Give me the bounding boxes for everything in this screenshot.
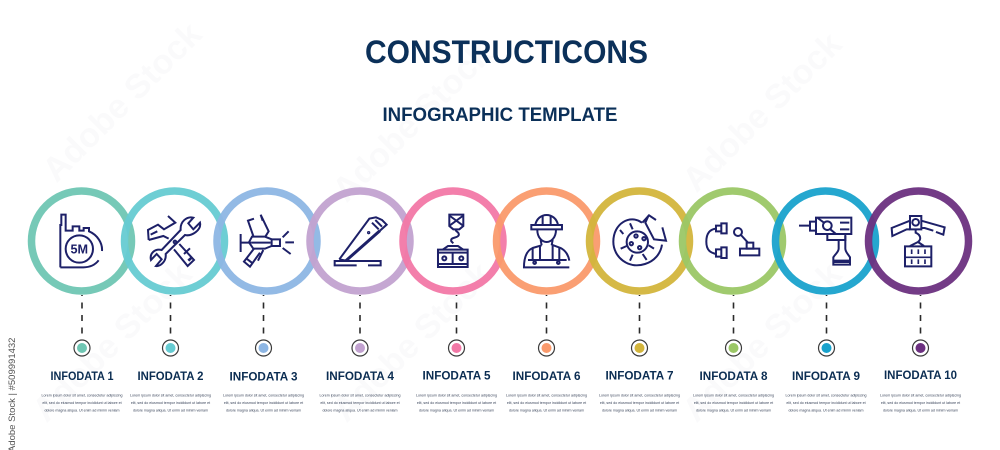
body text 6: dolore magna aliqua. Ut enim ad minim veniam xyxy=(509,408,584,412)
body text 10: elit, sed do eiusmod tempor incididunt ut labore et xyxy=(881,401,960,405)
marker 7 xyxy=(632,340,648,356)
label 6: INFODATA 6 xyxy=(512,369,581,383)
connector line 6 xyxy=(546,295,548,341)
body text 9: Lorem ipsum dolor sit amet, consectetur adipiscing xyxy=(786,394,866,398)
ring 7 xyxy=(590,191,690,291)
body text 2 xyxy=(130,394,211,412)
body text 7: dolore magna aliqua. Ut enim ad minim veniam xyxy=(602,408,677,412)
connector line 2 xyxy=(170,295,172,341)
icon: crane with container xyxy=(892,216,945,266)
body text 4: elit, sed do eiusmod tempor incididunt ut labore et xyxy=(320,401,400,405)
connector line 1 xyxy=(81,295,83,341)
marker 2 xyxy=(162,340,178,356)
ring 5 xyxy=(403,191,503,291)
body text 8: dolore magna aliqua. Ut enim ad minim veniam xyxy=(696,408,771,412)
label 3: INFODATA 3 xyxy=(230,370,298,384)
marker 3 xyxy=(256,340,272,356)
ring 2 xyxy=(124,191,224,291)
marker 10 xyxy=(912,340,928,356)
body text 4: Lorem ipsum dolor sit amet, consectetur adipiscing xyxy=(320,394,400,398)
ring 8 xyxy=(682,191,782,291)
label 7: INFODATA 7 xyxy=(606,368,674,382)
body text 10 xyxy=(880,394,961,412)
marker 4 xyxy=(352,340,368,356)
connector line 3 xyxy=(262,295,264,341)
body text 2: elit, sed do eiusmod tempor incididunt ut labore et xyxy=(131,401,210,405)
body text 2: Lorem ipsum dolor sit amet, consectetur adipiscing xyxy=(130,394,211,398)
ring 1 xyxy=(32,191,132,291)
label 1: INFODATA 1 xyxy=(50,369,114,383)
label 8: INFODATA 8 xyxy=(700,369,768,383)
connector line 4 xyxy=(359,295,361,341)
body text 1: elit, sed do eiusmod tempor incididunt ut labore et xyxy=(42,401,122,405)
body text 7: elit, sed do eiusmod tempor incididunt ut labore et xyxy=(600,401,679,405)
body text 2: dolore magna aliqua. Ut enim ad minim veniam xyxy=(133,408,208,412)
body text 9: elit, sed do eiusmod tempor incididunt ut labore et xyxy=(786,401,866,405)
icon: wrench and screwdriver xyxy=(148,216,200,266)
body text 9 xyxy=(786,394,866,412)
text: Adobe Stock xyxy=(25,255,199,429)
icon: spray gun xyxy=(241,215,294,267)
body text 6: Lorem ipsum dolor sit amet, consectetur adipiscing xyxy=(506,394,587,398)
marker 5 xyxy=(448,340,464,356)
ring 3 xyxy=(217,191,317,291)
body text 3: Lorem ipsum dolor sit amet, consectetur adipiscing xyxy=(223,394,304,398)
body text 10: dolore magna aliqua. Ut enim ad minim veniam xyxy=(883,408,958,412)
marker 8 xyxy=(726,340,742,356)
label 10: INFODATA 10 xyxy=(884,368,957,382)
connector line 8 xyxy=(732,295,734,341)
subtitle: INFOGRAPHIC TEMPLATE xyxy=(382,104,618,126)
body text 4: dolore magna aliqua. Ut enim ad minim veniam xyxy=(322,408,398,412)
ring 6 xyxy=(496,191,596,291)
body text 5: Lorem ipsum dolor sit amet, consectetur adipiscing xyxy=(416,394,497,398)
text: Adobe Stock xyxy=(325,35,499,209)
connector line 9 xyxy=(826,295,828,341)
icon: saw xyxy=(335,217,387,265)
label 2: INFODATA 2 xyxy=(138,369,204,383)
body text 7: Lorem ipsum dolor sit amet, consectetur adipiscing xyxy=(599,394,680,398)
body text 10: Lorem ipsum dolor sit amet, consectetur adipiscing xyxy=(880,394,961,398)
text: Adobe Stock xyxy=(35,15,209,189)
body text 8: Lorem ipsum dolor sit amet, consectetur adipiscing xyxy=(693,394,774,398)
body text 1: Lorem ipsum dolor sit amet, consectetur adipiscing xyxy=(42,394,122,398)
body text 5 xyxy=(416,394,497,412)
body text 3 xyxy=(223,394,304,412)
body text 4 xyxy=(320,394,400,412)
body text 7 xyxy=(599,394,680,412)
marker 6 xyxy=(538,340,554,356)
label 9: INFODATA 9 xyxy=(792,369,860,383)
text: Adobe Stock xyxy=(675,255,849,429)
label 4: INFODATA 4 xyxy=(326,369,394,383)
ring 9 xyxy=(776,191,876,291)
marker 9 xyxy=(818,340,834,356)
icon: tape measure: 5M xyxy=(71,243,88,257)
body text 8: elit, sed do eiusmod tempor incididunt ut labore et xyxy=(694,401,773,405)
body text 6 xyxy=(506,394,587,412)
stock watermark id: Adobe Stock | #509991432 xyxy=(7,338,18,450)
connector line 5 xyxy=(456,295,458,341)
ring 10 xyxy=(868,191,968,291)
connector line 7 xyxy=(638,295,640,341)
label 5: INFODATA 5 xyxy=(422,368,491,382)
body text 3: dolore magna aliqua. Ut enim ad minim veniam xyxy=(226,408,301,412)
ring 4 xyxy=(310,191,410,291)
icon: brake disc xyxy=(613,215,666,265)
body text 6: elit, sed do eiusmod tempor incididunt ut labore et xyxy=(507,401,586,405)
body text 8 xyxy=(693,394,774,412)
marker 1 xyxy=(74,340,90,356)
body text 1 xyxy=(42,394,122,412)
icon: construction worker xyxy=(524,215,569,267)
icon: tape measure xyxy=(60,215,102,267)
body text 3: elit, sed do eiusmod tempor incididunt ut labore et xyxy=(224,401,303,405)
body text 1: dolore magna aliqua. Ut enim ad minim veniam xyxy=(44,408,120,412)
body text 5: dolore magna aliqua. Ut enim ad minim veniam xyxy=(419,408,494,412)
icon: electric drill xyxy=(799,218,851,265)
body text 9: dolore magna aliqua. Ut enim ad minim veniam xyxy=(788,408,864,412)
icon: crane hook with load xyxy=(438,215,468,267)
body text 5: elit, sed do eiusmod tempor incididunt ut labore et xyxy=(417,401,496,405)
text: Adobe Stock xyxy=(675,25,849,199)
icon: robotic connectors xyxy=(706,223,759,258)
title: CONSTRUCTICONS xyxy=(365,34,648,70)
text: Adobe Stock xyxy=(325,255,499,429)
connector line 10 xyxy=(920,295,922,341)
